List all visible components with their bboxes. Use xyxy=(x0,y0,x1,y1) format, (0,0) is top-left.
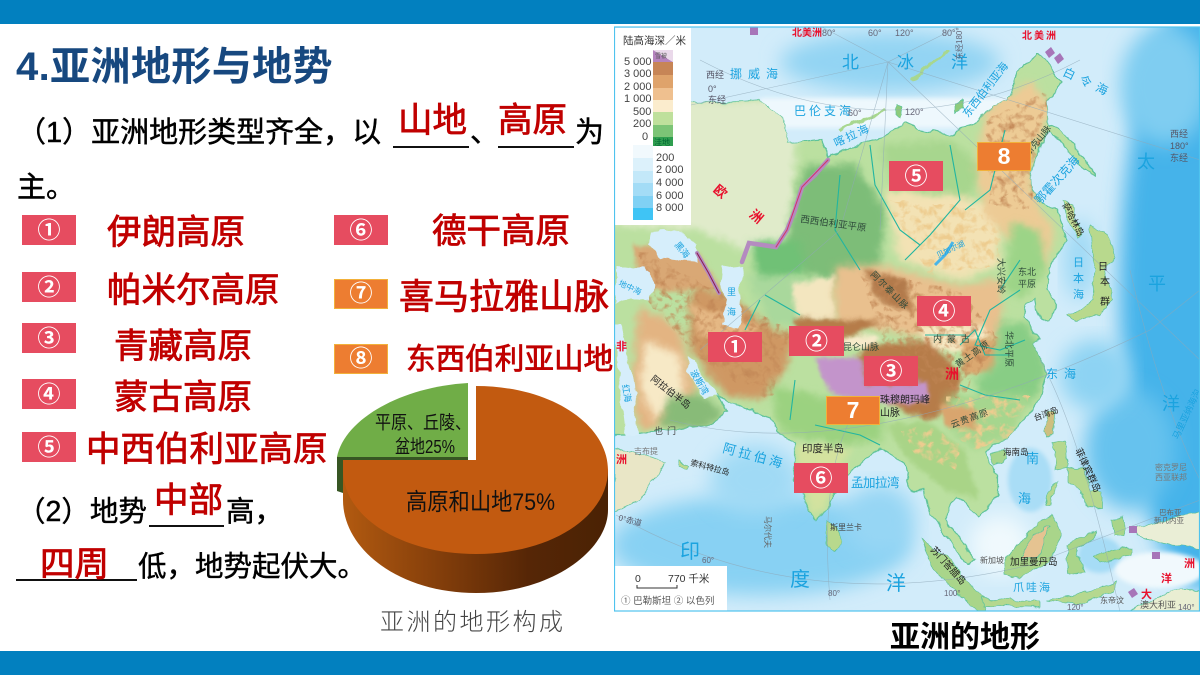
land labels: 西西伯利亚平原 xyxy=(800,213,867,234)
map legend: 5 000 xyxy=(624,56,652,68)
land and terrain xyxy=(610,53,1096,565)
land labels: 西经 xyxy=(1170,128,1188,139)
green slice xyxy=(337,383,471,493)
land labels: 印度半岛 xyxy=(802,442,844,455)
sea labels: 东海 xyxy=(1046,366,1082,381)
sea labels: 巴伦支海 xyxy=(794,103,854,118)
land labels: 80° xyxy=(942,28,956,38)
land labels: 斯里兰卡 xyxy=(830,522,862,532)
map legend: 200 xyxy=(633,118,651,130)
land labels: 60° xyxy=(848,108,862,118)
map legend: 4 000 xyxy=(656,177,684,189)
graticule xyxy=(616,26,1200,612)
land labels: 也门 xyxy=(654,425,680,436)
text block: landform types: 为 xyxy=(575,117,604,149)
land labels: 台湾岛 xyxy=(1032,405,1060,423)
text block: landform types xyxy=(17,102,604,204)
sea labels: 海 xyxy=(1073,287,1084,301)
sea labels: 南 xyxy=(1026,451,1039,466)
land labels: 菲律宾群岛 xyxy=(1072,446,1103,494)
map marker badges: ② xyxy=(805,328,828,354)
map legend: 陆高海深／米 xyxy=(623,34,686,47)
map legend xyxy=(615,28,691,225)
text block: landform types: 高原 xyxy=(498,102,567,140)
land labels: 本 xyxy=(1100,275,1110,288)
land labels: 180° xyxy=(1170,141,1189,151)
land labels: 海南岛 xyxy=(1003,447,1029,457)
map legend: 雪被 xyxy=(655,52,667,60)
red continent labels: 北美洲 xyxy=(792,26,822,39)
land labels: 100° xyxy=(944,589,961,598)
map legend: 500 xyxy=(633,106,651,118)
sea labels: 洋 xyxy=(951,53,968,72)
sea inland xyxy=(614,230,745,436)
legend list: plateaus and mountains xyxy=(22,213,613,469)
map marker badges: ④ xyxy=(932,298,956,324)
land labels: 密克罗尼 xyxy=(1155,462,1187,472)
map legend: 1 000 xyxy=(624,93,652,105)
sea labels: 洋 xyxy=(886,572,906,595)
text block: landform types: 山地 xyxy=(398,102,467,140)
sea labels: 爪哇海 xyxy=(1013,580,1052,594)
islands xyxy=(614,50,1200,615)
land labels: 0°赤道 xyxy=(617,512,643,528)
sea labels: 太 xyxy=(1137,152,1155,172)
map scale box: ① 巴勒斯坦 ② 以色列 xyxy=(621,595,714,607)
land labels: 日 xyxy=(1098,262,1108,273)
map: physical map of Asia xyxy=(614,26,1200,612)
legend list: plateaus and mountains: ⑦ xyxy=(350,280,372,306)
text block: terrain: 中部 xyxy=(154,482,223,520)
land labels: 80° xyxy=(828,589,840,598)
map caption: 亚洲的地形 xyxy=(890,621,1040,654)
map legend: 6 000 xyxy=(656,190,684,202)
red continent labels: 洋 xyxy=(1161,571,1172,585)
ocean background xyxy=(610,0,1200,612)
land labels: 140° xyxy=(1178,603,1195,612)
land labels: 昆仑山脉 xyxy=(843,341,879,352)
legend list: plateaus and mountains: 德干高原 xyxy=(432,213,570,251)
land labels: 内蒙古 xyxy=(933,333,975,344)
sea labels: 海 xyxy=(727,306,736,317)
red continent labels: 大 xyxy=(1141,587,1152,601)
map legend: 洼地 xyxy=(654,137,670,147)
map marker badges xyxy=(708,142,1031,493)
sea labels: 贝加尔湖 xyxy=(935,238,966,260)
land labels: 西亚联邦 xyxy=(1155,472,1187,482)
item 1 xyxy=(22,215,76,245)
land labels: 80° xyxy=(822,28,836,38)
map marker badges: ⑥ xyxy=(810,465,832,491)
orange slice xyxy=(343,386,608,593)
map scale box: 770 千米 xyxy=(668,572,710,585)
text block: terrain: （2）地势 xyxy=(17,496,147,528)
legend list: plateaus and mountains: ④ xyxy=(38,381,60,407)
land labels: 马尔代夫 xyxy=(763,516,773,548)
terrain shading xyxy=(610,80,1055,518)
text block: landform types: （1）亚洲地形类型齐全，以 xyxy=(17,117,381,149)
land labels: 云贵高原 xyxy=(949,406,990,430)
pie caption: 亚洲的地形构成 xyxy=(380,609,566,636)
land labels: 东帝汶 xyxy=(1100,595,1124,605)
text block: terrain: 低，地势起伏大。 xyxy=(138,551,366,583)
red continent labels: 洲 xyxy=(1184,557,1195,570)
sea labels: 白令海 xyxy=(1061,64,1116,101)
sea labels: 冰 xyxy=(897,53,914,72)
map marker badges: ⑤ xyxy=(904,163,928,189)
land labels: 吉布提 xyxy=(634,446,658,456)
land labels: 苏门答腊岛 xyxy=(928,544,968,587)
sea labels: 洋 xyxy=(1162,394,1180,414)
land labels: 华北平原 xyxy=(1004,331,1015,367)
bottom bar xyxy=(0,651,1200,675)
map legend: 200 xyxy=(656,152,674,164)
map legend: 2 000 xyxy=(656,164,684,176)
pie chart: landform composition xyxy=(337,383,608,593)
sea labels: 本 xyxy=(1073,271,1084,285)
item 1: ① xyxy=(38,217,60,243)
land labels xyxy=(617,27,1195,612)
map legend: 3 000 xyxy=(624,68,652,80)
land labels: 萨哈林岛 xyxy=(1060,201,1087,238)
land labels: 新加坡 xyxy=(980,555,1004,565)
sea labels: 黑海 xyxy=(672,239,692,260)
red continent labels: 洲 xyxy=(945,366,959,382)
map marker badges: 8 xyxy=(998,143,1010,169)
legend list: plateaus and mountains: 帕米尔高原 xyxy=(107,272,280,310)
legend list: plateaus and mountains: ⑤ xyxy=(38,434,60,460)
red continent labels: 北美洲 xyxy=(1022,29,1058,42)
land labels: 东北 xyxy=(1018,266,1036,277)
sea labels: 鄂霍次克海 xyxy=(1031,152,1082,207)
land labels: 黄土高原 xyxy=(953,338,992,370)
red continent labels xyxy=(616,26,1195,601)
land labels: 澳大利亚 xyxy=(1140,599,1176,610)
sea labels: 波斯湾 xyxy=(688,368,711,396)
purple country markers xyxy=(750,27,1160,598)
text block: terrain: 高， xyxy=(226,496,283,528)
sea labels: 喀拉海 xyxy=(831,121,873,150)
legend list: plateaus and mountains: 青藏高原 xyxy=(114,328,252,366)
legend list: plateaus and mountains: 伊朗高原 xyxy=(107,214,245,252)
sea labels xyxy=(617,53,1200,595)
map marker badges: ③ xyxy=(880,358,902,384)
depth swatches xyxy=(633,145,653,220)
land labels: 平原 xyxy=(1018,279,1036,289)
orange slice: 高原和山地75% xyxy=(406,489,555,516)
map legend: 8 000 xyxy=(656,202,684,214)
land labels: 索科特拉岛 xyxy=(689,457,731,477)
text block: terrain: 四周 xyxy=(40,546,109,584)
marker 1 xyxy=(708,332,762,362)
sea labels: 孟加拉湾 xyxy=(851,475,899,490)
sea labels: 印 xyxy=(680,540,700,563)
map border xyxy=(614,27,1200,611)
top bar xyxy=(0,0,1200,24)
land labels: 东经 xyxy=(708,94,726,105)
map legend: 0 xyxy=(642,131,648,143)
text block: terrain xyxy=(16,482,366,584)
legend list: plateaus and mountains: 东西伯利亚山地 xyxy=(406,343,613,376)
land labels: 大兴安岭 xyxy=(996,258,1007,294)
map legend: 2 000 xyxy=(624,81,652,93)
land labels: 山脉 xyxy=(880,406,900,419)
legend list: plateaus and mountains: 中西伯利亚高原 xyxy=(86,431,328,469)
red continent labels: 欧 xyxy=(711,182,730,201)
sea labels: 红海 xyxy=(620,383,634,403)
legend list: plateaus and mountains: ⑥ xyxy=(350,217,372,243)
red continent labels: 洲 xyxy=(747,207,766,226)
green slice: 盆地25% xyxy=(395,436,455,457)
land labels: 加里曼丹岛 xyxy=(1010,556,1058,568)
legend list: plateaus and mountains: 喜马拉雅山脉 xyxy=(399,278,609,317)
land labels: 群 xyxy=(1100,295,1110,308)
sea labels: 北 xyxy=(842,53,859,72)
land labels: 巴布亚 xyxy=(1159,507,1182,517)
land labels: 120° xyxy=(1067,603,1084,612)
land labels: 西经 xyxy=(706,69,724,80)
sea labels: 挪威海 xyxy=(730,66,784,81)
land labels: 新几内亚 xyxy=(1154,515,1184,525)
text block: landform types: 、 xyxy=(470,117,499,149)
sea labels: 日 xyxy=(1073,257,1084,269)
green slice: 平原、丘陵、 xyxy=(375,412,471,433)
land labels: 东经 xyxy=(1170,152,1188,163)
land labels: 120° xyxy=(895,28,914,38)
mountain ranges in purple xyxy=(697,160,828,293)
text block: landform types: 主。 xyxy=(17,172,75,204)
land labels: 60° xyxy=(702,556,714,565)
land labels: 阿尔泰山脉 xyxy=(869,269,912,312)
land labels: 120° xyxy=(905,107,924,117)
land labels: 珠穆朗玛峰 xyxy=(880,393,930,406)
land labels: 东经180° xyxy=(954,27,964,60)
sea labels: 阿拉伯海 xyxy=(721,440,787,471)
map scale box: 0 xyxy=(635,573,641,585)
sea labels: 平 xyxy=(1148,274,1166,294)
sea labels: 地中海 xyxy=(617,278,643,297)
sea labels: 度 xyxy=(790,568,810,591)
red continent labels: 非 xyxy=(616,339,627,353)
sea labels: 海 xyxy=(1018,491,1031,506)
elevation swatches xyxy=(653,50,673,146)
legend list: plateaus and mountains: ⑧ xyxy=(350,345,372,371)
legend list: plateaus and mountains: ③ xyxy=(38,325,60,351)
map marker badges: 7 xyxy=(847,397,859,423)
land labels: 60° xyxy=(868,28,882,38)
land labels: 阿拉伯半岛 xyxy=(648,373,693,412)
sea labels: 东西伯利亚海 xyxy=(959,59,1011,120)
title: 4.亚洲地形与地势 xyxy=(16,45,333,89)
map scale box xyxy=(615,566,727,611)
land labels: 0° xyxy=(708,84,717,94)
rivers and lake xyxy=(745,130,1025,445)
legend list: plateaus and mountains: 蒙古高原 xyxy=(114,379,252,417)
marker 1: ① xyxy=(724,334,746,360)
sea labels: 里 xyxy=(727,287,736,297)
land labels: 上扬斯克山脉 xyxy=(1010,123,1053,171)
red continent labels: 洲 xyxy=(616,453,627,466)
legend list: plateaus and mountains: ② xyxy=(38,274,60,300)
